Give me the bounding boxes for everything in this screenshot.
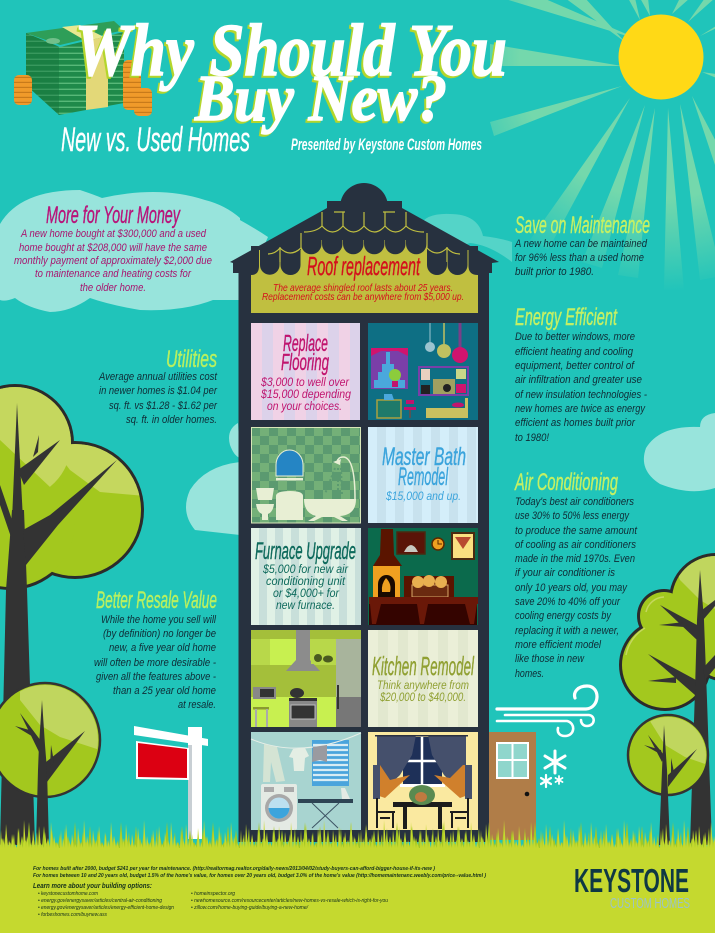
branches	[15, 700, 85, 845]
shingle outlines	[268, 212, 460, 262]
body: for 96% less than a used home	[515, 252, 644, 264]
coins	[14, 75, 32, 105]
links left: • forbeshomes.com/buynew.ass	[38, 912, 107, 918]
panel: roof replacement	[251, 212, 478, 313]
heading: Energy Efficient	[515, 304, 618, 331]
fridge	[336, 639, 361, 697]
cloud shape	[0, 190, 240, 312]
sun rays	[490, 0, 715, 290]
walls	[238, 262, 489, 842]
trunk and branches	[648, 570, 715, 845]
body: $5,000 for new air	[262, 562, 349, 576]
sources	[33, 866, 486, 879]
panel: kitchen remodel	[368, 630, 478, 727]
icon: snowflakes	[541, 751, 565, 787]
logo	[574, 862, 690, 912]
body: A new home can be maintained	[514, 238, 648, 250]
sources: For homes between 10 and 20 years old, budget 1.5% of the home's value, for homes over 20 years old, budget 3.0% of the home's value (http://homemaintenanc.weebly.com/price--value.html )	[33, 873, 486, 879]
links left	[38, 891, 174, 918]
links right: • homeinspector.org	[191, 891, 235, 897]
body: homes.	[515, 668, 544, 680]
body: to 1980!	[515, 432, 549, 444]
fireplace	[373, 566, 400, 597]
trunk and branches	[0, 403, 117, 845]
chair	[404, 400, 416, 418]
roof body: Replacement costs can be anywhere from $5,000 up.	[262, 291, 464, 303]
body	[262, 562, 349, 612]
roof heading: Roof replacement	[307, 251, 421, 281]
stool	[253, 707, 269, 727]
title	[14, 10, 507, 159]
money stack icon	[14, 21, 152, 116]
grass	[0, 818, 715, 854]
room background	[251, 528, 361, 625]
cloud: right	[644, 413, 715, 491]
body: on your choices.	[267, 399, 342, 413]
body	[14, 228, 212, 294]
curtain drapes	[376, 765, 410, 798]
body: of new insulation technologies -	[515, 389, 647, 401]
small right tree	[628, 710, 712, 845]
door	[489, 732, 536, 840]
left tree	[0, 380, 145, 845]
room: bathroom illustration	[252, 428, 360, 523]
body: sq. ft. vs $1.28 - $1.62 per	[109, 400, 218, 412]
links right: • newhomesource.com/resourcecenter/articles/new-homes-vs-resale-which-is-right-for-you	[191, 898, 388, 904]
washing machine	[261, 784, 297, 830]
body: like those in new	[515, 653, 585, 665]
body: $3,000 to well over	[260, 375, 350, 389]
portrait	[397, 532, 425, 554]
body: home bought at $208,000 will have the same	[19, 242, 207, 254]
heading: Air Conditioning	[514, 469, 618, 496]
branches	[644, 725, 697, 845]
window	[403, 737, 442, 785]
heading: Furnace Upgrade	[255, 538, 356, 565]
shelf	[419, 367, 468, 395]
body: only 10 years old, you may	[515, 582, 628, 594]
red panel	[136, 741, 189, 780]
body: Today's best air conditioners	[515, 496, 634, 508]
table	[369, 597, 478, 604]
roof body: The average shingled roof lasts about 25 years.	[273, 282, 453, 294]
table	[393, 802, 452, 807]
body: in newer homes is $1.04 per	[99, 385, 218, 397]
body	[377, 678, 469, 704]
sun	[618, 14, 704, 100]
links right	[191, 891, 388, 911]
microwave	[253, 687, 276, 699]
body: $15,000 depending	[260, 387, 351, 401]
highlight	[650, 717, 706, 764]
body: built prior to 1980.	[515, 266, 594, 278]
panel: more for your money cloud	[0, 190, 240, 312]
links left: • energy.gov/energysaver/articles/central-air-conditioning	[38, 898, 162, 904]
subtitle: New vs. Used Homes	[61, 121, 250, 159]
main heading: Why Should You	[75, 10, 507, 92]
framed picture	[452, 533, 474, 559]
room: dining illustration	[368, 732, 478, 830]
body: than a 25 year old home	[113, 685, 216, 697]
panel: master bath remodel	[368, 427, 478, 523]
body: replacing it with a newer,	[515, 625, 619, 637]
body: A new home bought at $300,000 and a used	[20, 228, 207, 240]
canopy fill	[622, 556, 715, 708]
body: the older home.	[80, 282, 146, 294]
body: or $4,000+ for	[273, 586, 340, 600]
clock	[432, 538, 444, 550]
panel: utilities	[98, 346, 218, 426]
sink	[276, 491, 303, 520]
clothes line	[251, 733, 361, 748]
wall	[368, 528, 478, 625]
heading: Kitchen Remodel	[372, 651, 475, 681]
room: laundry illustration	[251, 732, 361, 830]
body: to produce the same amount	[515, 525, 638, 537]
body: to maintenance and heating costs for	[35, 268, 192, 280]
wall	[251, 732, 361, 830]
hood	[286, 630, 320, 671]
room background	[368, 630, 478, 727]
roof	[230, 183, 499, 273]
room: kitchen illustration	[251, 630, 361, 727]
chairs	[377, 798, 395, 828]
links left: • keystonecustomhome.com	[38, 891, 98, 897]
bathtub	[304, 499, 356, 521]
tiled wall	[252, 428, 360, 523]
body: While the home you sell will	[101, 614, 216, 626]
body: monthly payment of approximately $2,000 due	[14, 255, 212, 267]
canopy	[0, 683, 100, 797]
bed	[426, 398, 468, 418]
body: use 30% to 50% less energy	[515, 510, 630, 522]
post	[188, 727, 202, 839]
room: living room illustration	[368, 528, 478, 625]
body: of cooling as air conditioners	[515, 539, 636, 551]
panel: air conditioning	[514, 469, 638, 680]
links left: • energy.gov/energysaver/articles/energy-efficient-home-design	[38, 905, 174, 911]
plant	[389, 369, 401, 381]
learn more heading: Learn more about your building options:	[33, 883, 152, 890]
cloud: behind house left	[200, 212, 268, 300]
heading: Better Resale Value	[96, 587, 217, 614]
house	[230, 183, 499, 842]
body: efficient heating and cooling	[515, 346, 634, 358]
canopy highlights	[0, 387, 140, 496]
body: efficient as homes built prior	[515, 417, 636, 429]
body: new homes are twice as energy	[515, 403, 646, 415]
upper cabinets	[251, 639, 336, 665]
panel: furnace upgrade	[251, 528, 361, 625]
body: at resale.	[178, 699, 216, 711]
panel: replace flooring: Flooring	[281, 349, 329, 375]
room background	[251, 323, 360, 420]
heading: Replace	[283, 330, 328, 356]
heading: Master Bath	[382, 443, 466, 471]
body: new furnace.	[276, 598, 335, 612]
panel: replace flooring	[251, 323, 360, 420]
main heading shadow: Why Should You	[73, 12, 505, 94]
hanging lamps	[425, 323, 468, 363]
lobe rims	[626, 597, 664, 655]
highlight	[20, 685, 98, 749]
room background	[368, 427, 478, 523]
icon: for sale sign	[134, 726, 208, 839]
links right: • zillow.com/home-buying-guide/buying-a-new-home/	[191, 905, 308, 911]
shower	[337, 457, 355, 499]
body: air infiltration and greater use	[515, 374, 642, 386]
panel background	[251, 240, 478, 313]
sources: For homes built after 2000, budget $241 per year for maintenance. (http://realtormag.realtor.org/daily-news/2013/04/02/study-buyers-can-afford-bigger-house-if-its-new )	[33, 866, 435, 872]
room: bedroom illustration	[368, 323, 478, 420]
small left tree	[0, 682, 102, 845]
shingles	[251, 232, 478, 275]
door window	[497, 743, 528, 778]
wall	[251, 630, 361, 727]
lower cabinets	[251, 697, 336, 727]
body: $15,000 and up.	[385, 489, 461, 503]
main heading	[75, 10, 507, 135]
body: cooling energy costs by	[515, 610, 612, 622]
body: given all the features above -	[96, 671, 216, 683]
panel: better resale value	[94, 587, 217, 711]
heading: More for Your Money	[46, 202, 181, 229]
icon: wind	[497, 686, 597, 736]
highlight	[678, 556, 715, 609]
footer band	[0, 852, 715, 933]
wall	[368, 323, 478, 420]
body	[260, 375, 351, 413]
body: will often be more desirable -	[94, 657, 216, 669]
cloud: behind roof right	[345, 214, 512, 300]
body: equipment, better control of	[515, 360, 635, 372]
ironing board	[298, 799, 353, 803]
canopy outline	[619, 553, 715, 711]
roof body	[262, 282, 464, 303]
body: if your air conditioner is	[515, 567, 615, 579]
body: Think anywhere from	[377, 678, 469, 692]
chimney	[373, 529, 402, 566]
body	[514, 238, 648, 278]
main heading: Buy New?	[194, 62, 447, 135]
window	[371, 348, 408, 389]
body: more efficient model	[515, 639, 601, 651]
body: new, a five year old home	[109, 642, 216, 654]
body: Average annual utilities cost	[98, 371, 218, 383]
panel: master bath remodel: Remodel	[398, 463, 449, 491]
cloud: mid left	[186, 423, 240, 535]
body: conditioning unit	[266, 574, 346, 588]
canopy outline	[0, 384, 144, 590]
plant	[409, 785, 435, 805]
stove	[289, 699, 317, 727]
body: Due to better windows, more	[515, 331, 635, 343]
canopy fill	[0, 387, 141, 587]
desk	[377, 394, 401, 418]
mirror	[276, 450, 303, 476]
body	[515, 496, 638, 680]
body: sq. ft. in older homes.	[126, 414, 217, 426]
sofa	[404, 576, 454, 598]
body: (by definition) no longer be	[103, 628, 216, 640]
shelf of teapots	[311, 651, 336, 664]
body	[515, 331, 647, 444]
blind	[312, 740, 349, 786]
door panel	[489, 732, 536, 840]
right tree	[619, 550, 715, 845]
panel: energy efficient	[515, 304, 647, 444]
wall	[368, 732, 478, 830]
arm	[134, 726, 208, 746]
shorts	[312, 745, 327, 762]
shirt	[289, 748, 309, 771]
trousers	[263, 744, 285, 782]
panel: save on maintenance	[514, 212, 650, 278]
body: $20,000 to $40,000.	[379, 690, 466, 704]
door knob	[525, 792, 529, 796]
presenter: Presented by Keystone Custom Homes	[291, 135, 482, 154]
main heading shadow: Buy New?	[192, 64, 445, 137]
body	[98, 371, 218, 426]
toilet	[256, 488, 274, 520]
heading: Utilities	[166, 346, 217, 373]
body	[94, 614, 216, 711]
canopy	[628, 715, 708, 795]
curtains	[377, 735, 416, 790]
main heading shadow	[73, 12, 505, 137]
iron	[341, 788, 350, 799]
footer notes	[33, 866, 486, 918]
body: made in the mid 1970s. Even	[515, 553, 635, 565]
body: save 20% to 40% off your	[515, 596, 621, 608]
